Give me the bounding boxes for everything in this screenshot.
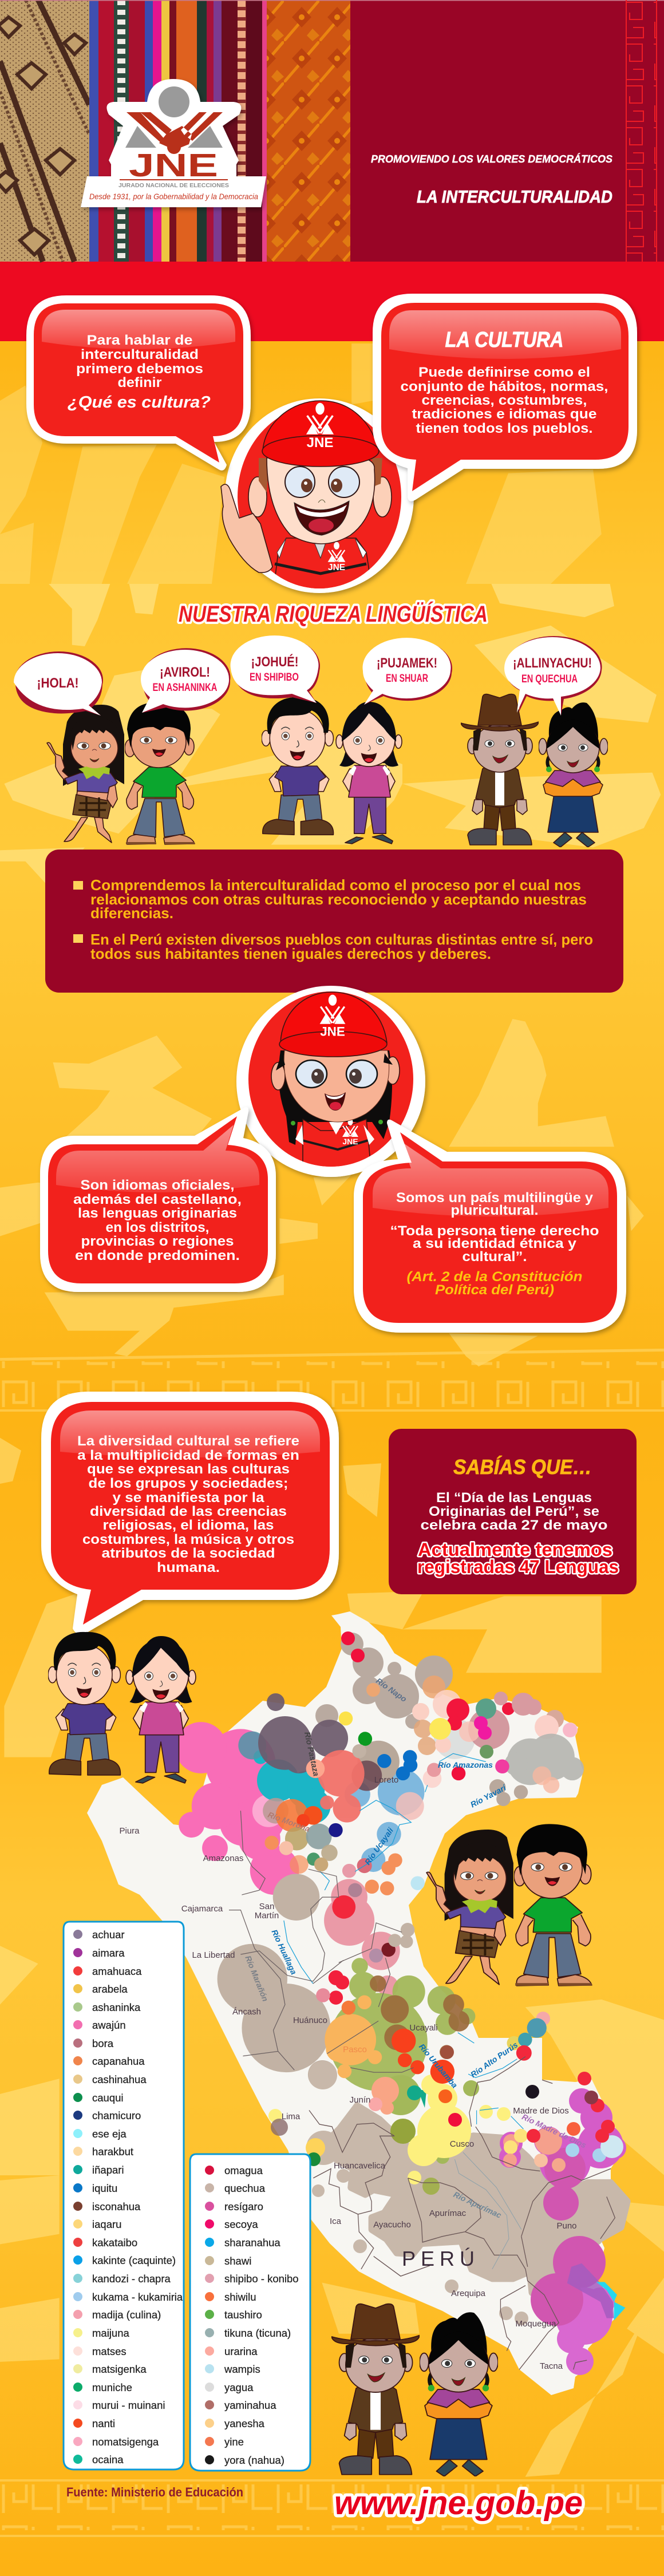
text: multilingüe: Somos un país multilingüe y xyxy=(396,1190,594,1206)
text: para hablar: interculturalidad xyxy=(81,347,199,362)
text: diversidad: La diversidad cultural se refiere xyxy=(77,1433,299,1449)
text: diversidad: que se expresan las culturas xyxy=(87,1461,290,1477)
legend: languages column one: nomatsigenga xyxy=(92,2436,159,2448)
text: diversidad: a la multiplicidad de formas en xyxy=(77,1448,299,1463)
text: idiomas oficiales: provincias o regiones xyxy=(81,1234,234,1249)
text: diversidad: de los grupos y sociedades; xyxy=(88,1476,288,1491)
legend: languages column one: harakbut xyxy=(92,2146,133,2158)
map labels: La Libertad xyxy=(192,1950,235,1960)
callout: 47 lenguas: registradas 47 Lenguas xyxy=(417,1556,619,1577)
speech: allinyachu: ¡ALLINYACHU! xyxy=(513,655,592,671)
legend: languages column two: omagua xyxy=(224,2164,263,2176)
text: definición de cultura xyxy=(401,365,608,436)
text: definición de cultura: conjunto de hábitos, normas, xyxy=(401,379,608,394)
map labels: Puno xyxy=(556,2221,577,2231)
legend: languages column two: yagua xyxy=(224,2381,254,2393)
text: multilingüe: “Toda persona tiene derecho xyxy=(390,1223,599,1239)
character: man with hat xyxy=(461,694,539,845)
map labels: Cusco xyxy=(450,2139,474,2149)
text: multilingüe: cultural”. xyxy=(463,1249,527,1265)
text: multilingüe xyxy=(390,1190,599,1298)
map labels: Apurímac xyxy=(429,2208,467,2218)
legend: languages column one: bora xyxy=(92,2037,114,2049)
speech bubble: qué es cultura xyxy=(26,295,251,471)
logo: JNE xyxy=(81,79,266,207)
legend: languages column two: sharanahua xyxy=(224,2237,280,2249)
text: idiomas oficiales: además del castellano, xyxy=(73,1192,242,1207)
legend: languages column one: chamicuro xyxy=(92,2109,141,2121)
text: diversidad: y se manifiesta por la xyxy=(112,1490,264,1506)
speech: allinyachu: EN QUECHUA xyxy=(521,673,578,685)
map labels: Río Apurímac xyxy=(452,2190,503,2220)
bullet text one: diferencias. xyxy=(90,904,173,922)
speech: johué: EN SHIPIBO xyxy=(250,671,299,683)
text: idiomas oficiales: Son idiomas oficiales, xyxy=(80,1178,235,1193)
text: diversidad: humana. xyxy=(157,1560,220,1575)
legend: languages column one xyxy=(64,1922,184,2470)
decorative key strip xyxy=(626,0,657,262)
legend: languages column two: tikuna (ticuna) xyxy=(224,2327,291,2339)
text: día de las lenguas xyxy=(420,1490,608,1533)
text: diversidad xyxy=(77,1433,299,1575)
legend: languages column one: amahuaca xyxy=(92,1965,142,1977)
logo: JNE: Desde 1931, por la Gobernabilidad y la Democracia xyxy=(89,192,258,201)
legend: languages column one: ashaninka xyxy=(92,2001,141,2013)
character: man with hat on map xyxy=(331,2304,420,2475)
department borders xyxy=(229,1811,413,2072)
speech: hola xyxy=(14,651,103,716)
legend: languages column two: shawi xyxy=(224,2255,251,2267)
map labels: PERÚ xyxy=(402,2247,480,2270)
text: definición de cultura: tienen todos los pueblos. xyxy=(416,421,593,436)
heading: nuestra riqueza lingüística: NUESTRA RIQUEZA LINGÜÍSTICA xyxy=(179,601,488,627)
speech bubble: país multilingüe xyxy=(354,1120,626,1333)
speech: avirol: ¡AVIROL! xyxy=(160,665,210,680)
speech: pujamek: EN SHUAR xyxy=(386,673,428,685)
band: red header strip xyxy=(0,262,664,341)
character: girl xyxy=(336,702,402,844)
legend: languages column two: shiwilu xyxy=(224,2291,256,2303)
mascot: boy with cap xyxy=(221,398,414,593)
map labels: Huánuco xyxy=(293,2016,327,2025)
text: multilingüe: a su identidad étnica y xyxy=(413,1236,577,1251)
legend: languages column one: ocaina xyxy=(92,2453,124,2466)
source note: Fuente: Ministerio de Educación xyxy=(66,2485,243,2499)
text: multilingüe: (Art. 2 de la Constitución xyxy=(406,1269,583,1285)
speech: avirol xyxy=(141,648,230,713)
legend: languages column one: matsigenka xyxy=(92,2363,147,2375)
map labels: Ayacucho xyxy=(373,2220,411,2230)
text: para hablar: ¿Qué es cultura? xyxy=(68,393,211,412)
map labels: Arequipa xyxy=(451,2289,486,2298)
text: diversidad: costumbres, la música y otros xyxy=(82,1532,294,1547)
bullet one xyxy=(73,881,83,890)
bullet text two: En el Perú existen diversos pueblos con culturas distintas entre sí, pero xyxy=(90,931,593,948)
map labels: San xyxy=(259,1902,274,1911)
text: para hablar: Para hablar de xyxy=(87,333,192,348)
text: definición de cultura: Puede definirse como el xyxy=(418,365,590,380)
legend: languages column two: yaminahua xyxy=(224,2399,276,2411)
map labels: Loreto xyxy=(374,1775,398,1785)
legend: languages column one: muniche xyxy=(92,2381,132,2393)
map labels xyxy=(119,1676,588,2371)
map labels: Madre de Dios xyxy=(513,2106,569,2116)
text: definición de cultura: creencias, costumbres, xyxy=(421,393,587,408)
map labels: Río Huallaga xyxy=(270,1928,299,1976)
map labels: Río Urubamba xyxy=(417,2042,460,2090)
legend: languages column one: murui - muinani xyxy=(92,2399,165,2411)
character: girl beside bubble xyxy=(126,1636,196,1783)
legend: languages column one: iñapari xyxy=(92,2164,124,2176)
map outline xyxy=(87,1611,627,2395)
language circles: north xyxy=(315,1631,578,1773)
speech bubble: idiomas oficiales xyxy=(40,1107,276,1292)
text: multilingüe: pluricultural. xyxy=(451,1203,538,1218)
speech: johué: ¡JOHUÉ! xyxy=(251,654,299,670)
legend: languages column one: iaqaru xyxy=(92,2218,121,2230)
character: andean woman on map xyxy=(420,2312,498,2476)
legend: languages column one: cauqui xyxy=(92,2092,124,2104)
map labels: Río Alto Purús xyxy=(469,2040,520,2079)
legend: languages column one: madija (culina) xyxy=(92,2309,161,2321)
map labels: Río Morona xyxy=(267,1810,311,1834)
bullet text one: Comprendemos la interculturalidad como el proceso por el cual nos xyxy=(90,876,581,894)
map labels: Río Napo xyxy=(374,1676,409,1704)
south borders and rivers xyxy=(309,2057,615,2369)
legend: languages column one: ese eja xyxy=(92,2128,127,2140)
legend: languages column one: cashinahua xyxy=(92,2073,147,2085)
legend: languages column two: urarina xyxy=(224,2345,258,2357)
text: idiomas oficiales xyxy=(73,1178,242,1263)
legend: languages column two: secoya xyxy=(224,2218,258,2230)
character: boy xyxy=(262,697,334,835)
header: maroon title panel xyxy=(0,0,664,262)
language circles: south xyxy=(268,2045,627,2375)
bullet two xyxy=(73,934,83,943)
bullet text one: relacionamos con otras culturas reconociendo y aceptando nuestras xyxy=(90,891,587,908)
text: para hablar: definir xyxy=(118,375,161,390)
legend: languages column two: yanesha xyxy=(224,2417,265,2429)
legend: languages column one: kukama - kukamiria xyxy=(92,2291,183,2303)
map: peru language distribution xyxy=(87,1611,627,2395)
speech bubble: diversidad cultural xyxy=(41,1392,339,1634)
language circles: center xyxy=(175,1693,584,2091)
map labels: Río Marañón xyxy=(243,1954,270,2002)
speech: avirol: EN ASHANINKA xyxy=(152,682,218,694)
legend: languages column one: aimara xyxy=(92,1947,125,1959)
character: native girl on map xyxy=(426,1830,513,1985)
legend: languages column two: shipibo - konibo xyxy=(224,2273,299,2285)
callout: 47 lenguas xyxy=(417,1539,619,1577)
callout: 47 lenguas: Actualmente tenemos xyxy=(418,1539,612,1560)
legend: languages column one: maijuna xyxy=(92,2327,129,2339)
text: diversidad: atributos de la sociedad xyxy=(102,1546,275,1561)
panel: sabías que xyxy=(389,1429,637,1594)
text: día de las lenguas: celebra cada 27 de mayo xyxy=(420,1518,608,1533)
legend: languages column two: taushiro xyxy=(224,2309,262,2321)
legend: languages column one: awajún xyxy=(92,2019,126,2031)
speech: hola: ¡HOLA! xyxy=(37,675,79,691)
legend: languages column two: yora (nahua) xyxy=(224,2454,284,2466)
legend: languages column two xyxy=(190,2154,310,2471)
text: diversidad: religiosas, el idioma, las xyxy=(103,1518,274,1533)
map labels: Río Madre de Dios xyxy=(520,2112,588,2150)
logo: JNE: JURADO NACIONAL DE ELECCIONES xyxy=(118,182,229,189)
character: boy beside bubble xyxy=(48,1632,120,1775)
website url: www.jne.gob.pe xyxy=(334,2484,583,2522)
map labels: Río Ucayali xyxy=(363,1826,396,1867)
legend: languages column two: yine xyxy=(224,2436,244,2448)
bullet text two xyxy=(90,931,593,962)
map labels: Huancavelica xyxy=(334,2161,386,2171)
panel: interculturalidad xyxy=(45,850,623,993)
header: textile photo panels xyxy=(0,0,350,262)
map labels: Río Pastaza xyxy=(303,1731,321,1777)
legend: languages column one: achuar xyxy=(92,1929,125,1941)
map labels: Cajamarca xyxy=(181,1904,223,1914)
map labels: Lima xyxy=(282,2112,301,2121)
legend: languages column one: nanti xyxy=(92,2417,115,2429)
map labels: Amazonas xyxy=(203,1854,243,1863)
character: andean woman xyxy=(539,702,608,847)
text: idiomas oficiales: en los distritos, xyxy=(105,1220,210,1235)
text: para hablar xyxy=(68,333,211,412)
map labels: Ica xyxy=(330,2217,342,2226)
legend: languages column one: capanahua xyxy=(92,2055,145,2067)
text: multilingüe: Política del Perú) xyxy=(435,1282,554,1298)
speech: pujamek: ¡PUJAMEK! xyxy=(377,655,437,671)
map labels: Piura xyxy=(119,1826,140,1836)
legend: languages column one: kandozi - chapra xyxy=(92,2273,171,2285)
rivers xyxy=(284,1753,486,2043)
map labels: Ucayali xyxy=(409,2023,438,2033)
map labels: Junín xyxy=(350,2095,370,2105)
map labels: Río Amazonas xyxy=(438,1760,493,1769)
legend: languages column one: iquitu xyxy=(92,2182,117,2194)
legend: languages column two: quechua xyxy=(224,2182,266,2194)
legend: languages column one: arabela xyxy=(92,1983,128,1995)
map labels: Pasco xyxy=(343,2045,367,2055)
map labels: Moquegua xyxy=(516,2319,556,2329)
legend: languages column one: isconahua xyxy=(92,2200,141,2212)
text: idiomas oficiales: en donde predominen. xyxy=(75,1248,240,1263)
text: día de las lenguas: El “Día de las Lenguas xyxy=(436,1490,592,1506)
heading: sabías que: SABÍAS QUE… xyxy=(453,1455,592,1479)
header title: LA INTERCULTURALIDAD xyxy=(417,187,612,207)
legend: languages column one: matses xyxy=(92,2345,127,2357)
character: native boy xyxy=(125,702,195,844)
map labels: Áncash xyxy=(232,2007,261,2017)
bullet text one xyxy=(90,876,587,922)
map labels: Tacna xyxy=(540,2361,563,2371)
heading: la cultura: LA CULTURA xyxy=(445,328,563,352)
speech: johué xyxy=(231,635,320,703)
legend: languages column two: resígaro xyxy=(224,2200,263,2212)
bullet text two: todos sus habitantes tienen iguales derechos y deberes. xyxy=(90,945,491,962)
legend: languages column two: wampis xyxy=(224,2363,260,2375)
mascot: girl with cap xyxy=(236,986,425,1177)
legend: languages column one: kakataibo xyxy=(92,2237,137,2249)
text: idiomas oficiales: las lenguas originarias xyxy=(78,1206,237,1221)
map labels: Río Yavarí xyxy=(469,1783,508,1809)
legend: languages column one: kakinte (caquinte) xyxy=(92,2254,176,2266)
text: definición de cultura: tradiciones e idiomas que xyxy=(412,406,596,422)
text: diversidad: diversidad de las creencias xyxy=(90,1504,287,1519)
speech: allinyachu xyxy=(504,636,602,716)
speech: pujamek xyxy=(362,638,452,705)
header subtitle: PROMOVIENDO LOS VALORES DEMOCRÁTICOS xyxy=(371,153,612,165)
character: native boy on map xyxy=(514,1824,592,1986)
speech bubble: la cultura xyxy=(373,294,637,501)
text: para hablar: primero debemos xyxy=(76,361,203,377)
map labels: Martín xyxy=(255,1911,279,1921)
text: día de las lenguas: Originarias del Perú”, se xyxy=(429,1504,599,1519)
character: native girl xyxy=(47,705,124,843)
logo: JNE: JNE xyxy=(129,147,218,184)
